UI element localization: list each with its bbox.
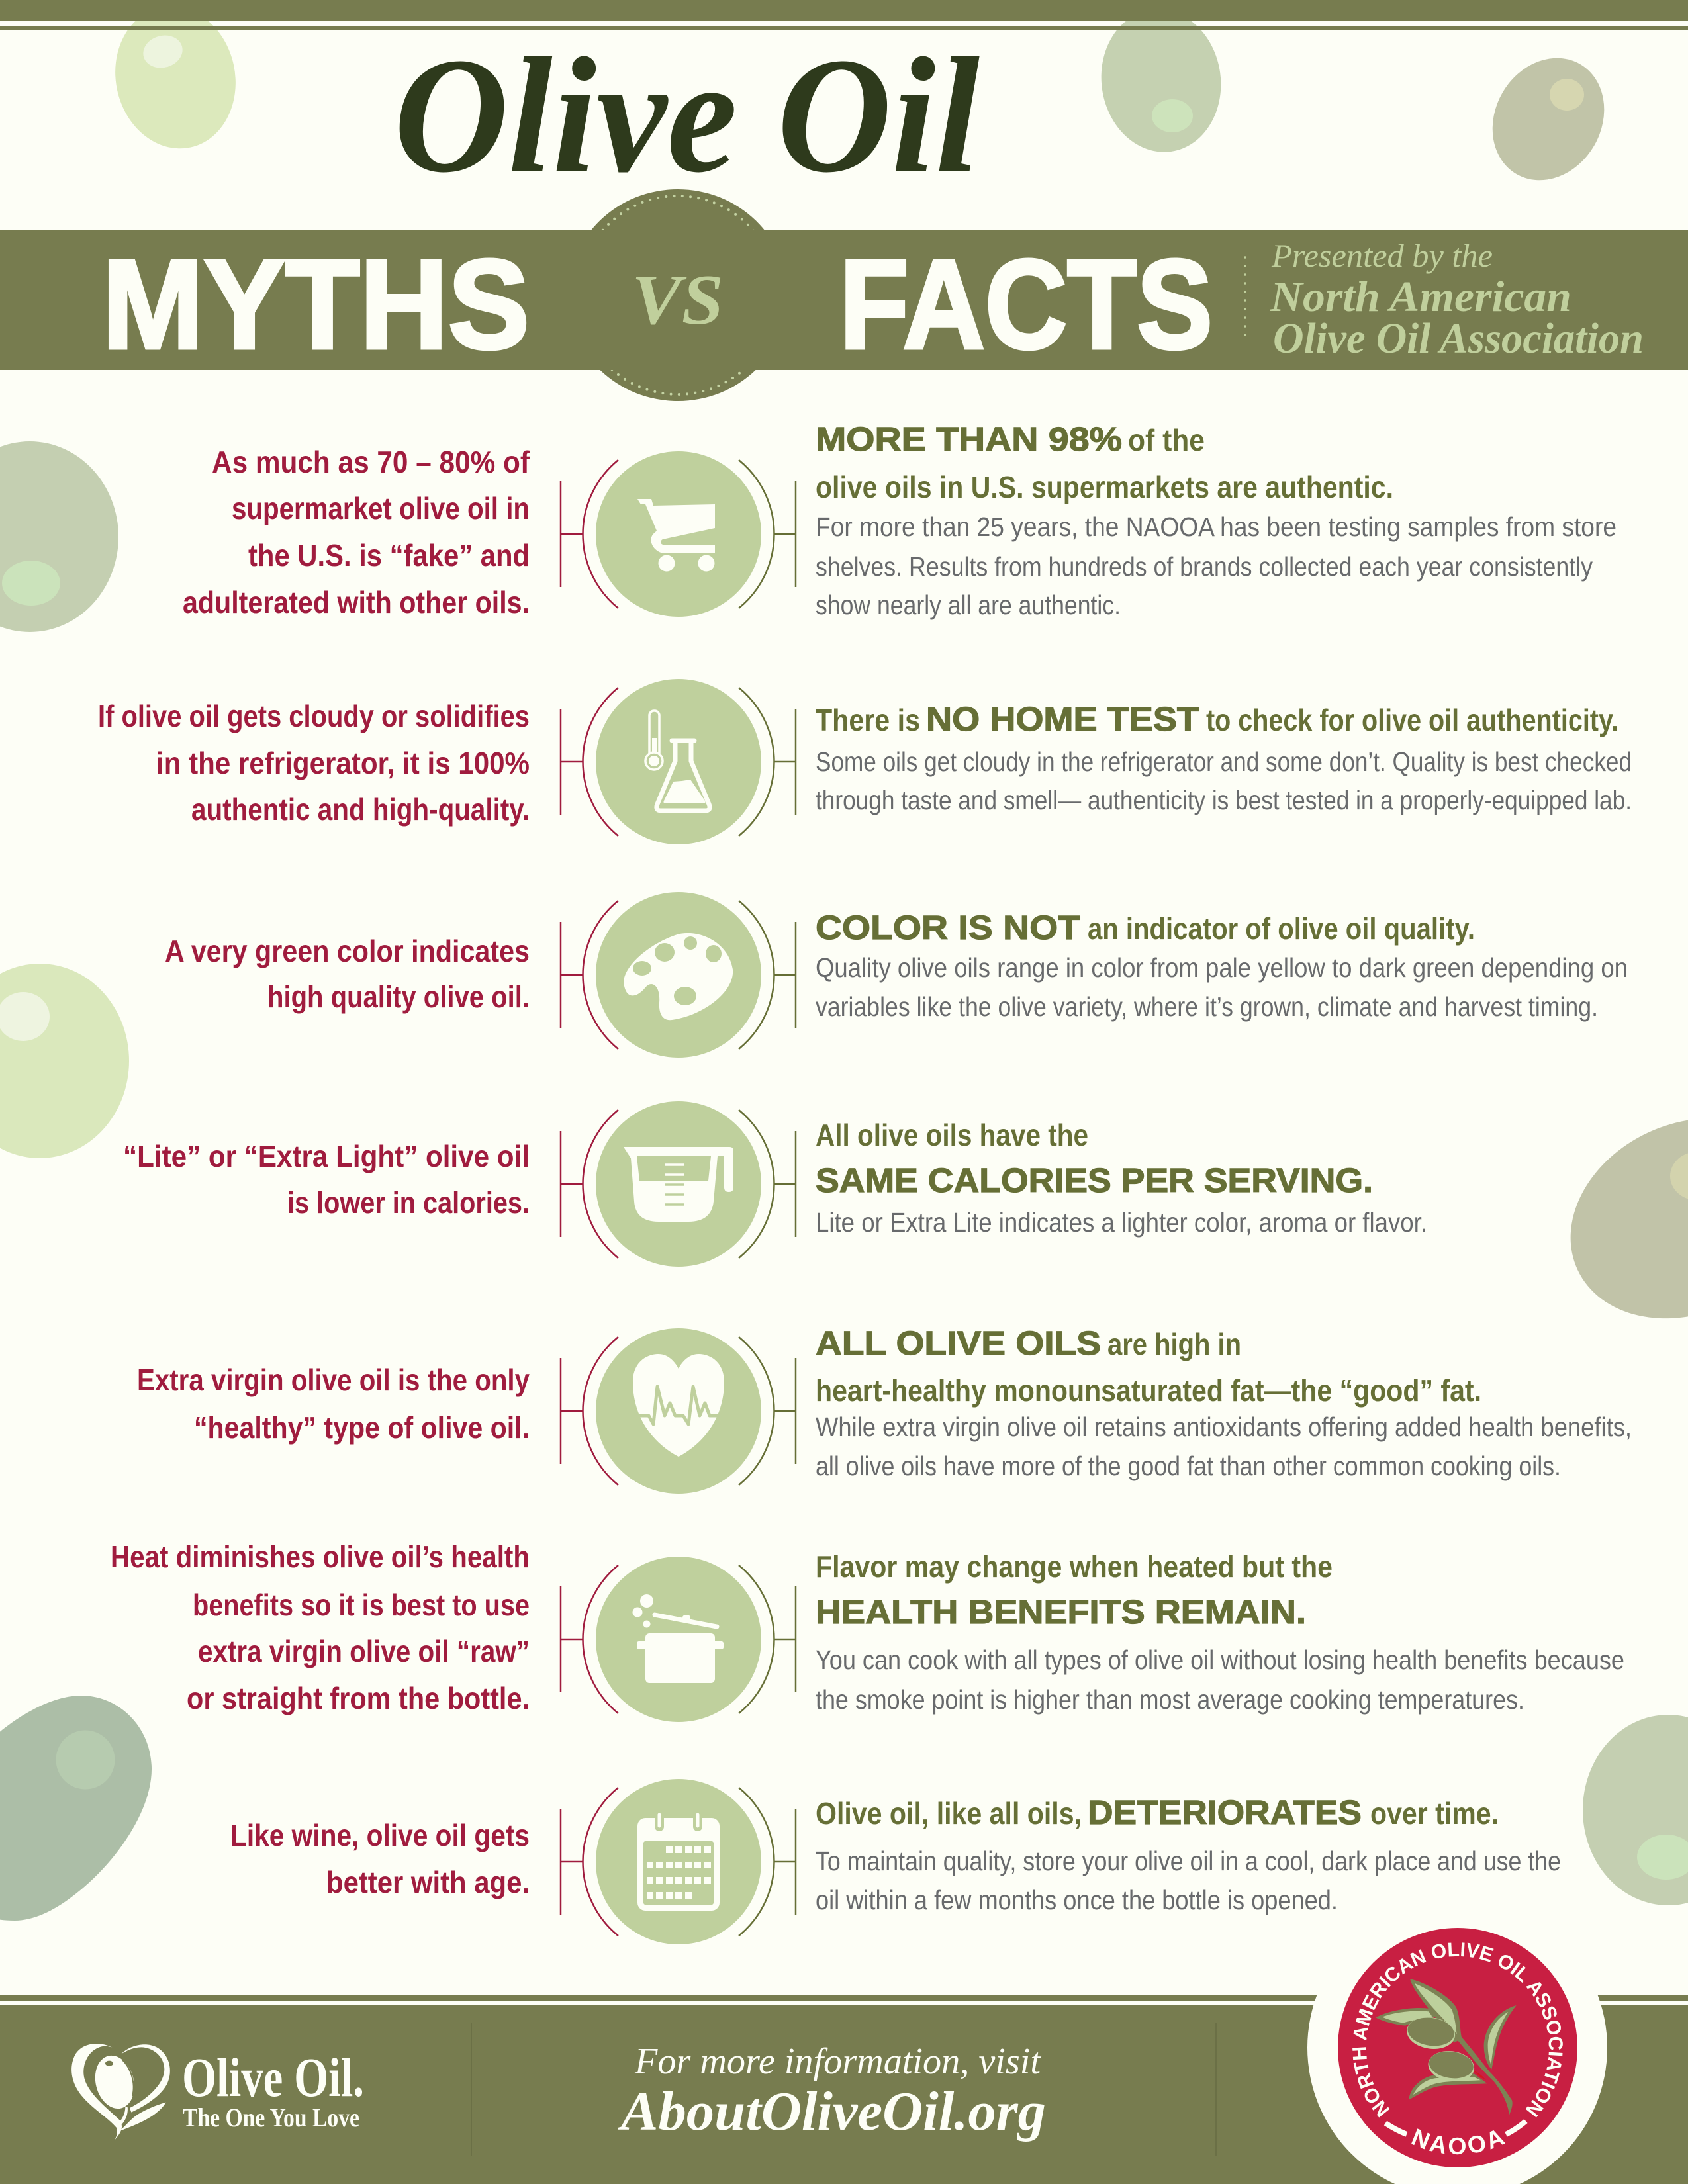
decorative olive: top centre bbox=[1092, 2, 1230, 159]
row 3: colour bbox=[165, 892, 1628, 1058]
row 4: calories bbox=[123, 1101, 1427, 1267]
fact 1: MORE THAN 98% bbox=[816, 420, 1122, 458]
seal text: acronym: NAOOA bbox=[1411, 2128, 1505, 2155]
tagline: The One You Love bbox=[183, 2103, 359, 2132]
myth 3: A very green color indicates bbox=[165, 934, 530, 968]
fact 2: NO HOME TEST bbox=[926, 700, 1199, 738]
top border band bbox=[0, 0, 1688, 30]
presented by bbox=[1270, 237, 1644, 363]
fact 6: Flavor may change when heated but the bbox=[816, 1549, 1333, 1584]
fact 6: the smoke point is higher than most average cooking temperatures. bbox=[816, 1684, 1524, 1715]
myth 6: benefits so it is best to use bbox=[193, 1588, 530, 1622]
NAOOA seal bbox=[1307, 1928, 1607, 2184]
fact 7: To maintain quality, store your olive oil in a cool, dark place and use the bbox=[816, 1846, 1561, 1876]
myth 5: Extra virgin olive oil is the only bbox=[137, 1363, 530, 1397]
connector and circle 1 bbox=[561, 451, 796, 617]
myth 6: Heat diminishes olive oil’s health bbox=[111, 1539, 530, 1574]
fact 1: show nearly all are authentic. bbox=[816, 590, 1121, 620]
fact 3: COLOR IS NOT bbox=[816, 909, 1080, 946]
fact 7: Olive oil, like all oils, bbox=[816, 1796, 1082, 1831]
row 1: supermarket authenticity bbox=[183, 420, 1617, 620]
myth 6: extra virgin olive oil “raw” bbox=[198, 1634, 530, 1668]
decorative olive: top right bbox=[1471, 38, 1626, 201]
wordmark: Olive Oil. bbox=[182, 2047, 364, 2109]
icon: flask and thermometer bbox=[645, 711, 710, 811]
myth 1: the U.S. is “fake” and bbox=[248, 538, 530, 572]
fact 1: olive oils in U.S. supermarkets are authentic. bbox=[816, 470, 1393, 504]
myth 6: or straight from the bottle. bbox=[187, 1681, 530, 1715]
myth 1: adulterated with other oils. bbox=[183, 585, 530, 619]
fact 4: All olive oils have the bbox=[816, 1118, 1088, 1152]
footer band bbox=[0, 1995, 1688, 2184]
myth 7 bbox=[230, 1818, 530, 1899]
fact 5: all olive oils have more of the good fat than other common cooking oils. bbox=[816, 1451, 1561, 1481]
icon: palette bbox=[624, 933, 733, 1020]
fact 6 bbox=[816, 1549, 1624, 1715]
myth 5 bbox=[137, 1363, 530, 1445]
presented by: North American bbox=[1270, 273, 1571, 321]
myth 4 bbox=[123, 1139, 530, 1220]
connector and circle 7 bbox=[561, 1779, 796, 1944]
heading: myths: MYTHS bbox=[102, 233, 530, 375]
row 6: heat bbox=[111, 1539, 1624, 1722]
myth 3: high quality olive oil. bbox=[267, 979, 530, 1014]
connector and circle 2 bbox=[561, 679, 796, 844]
presented by: Olive Oil Association bbox=[1273, 314, 1644, 363]
connector and circle 6 bbox=[561, 1557, 796, 1722]
title: Olive Oil bbox=[394, 24, 980, 207]
myth 6 bbox=[111, 1539, 530, 1715]
fact 1: For more than 25 years, the NAOOA has been testing samples from store bbox=[816, 512, 1617, 542]
fact 2: There is bbox=[816, 703, 920, 737]
fact 5: heart-healthy monounsaturated fat—the “good” fat. bbox=[816, 1373, 1481, 1408]
icon: heart with olive bbox=[71, 2044, 170, 2140]
icon: olive branch bbox=[1376, 1979, 1517, 2115]
myth 7: Like wine, olive oil gets bbox=[230, 1818, 530, 1852]
row 2: home test bbox=[98, 679, 1632, 844]
decorative olive: left middle bbox=[0, 964, 129, 1158]
decorative olive: right upper bbox=[1538, 1081, 1688, 1355]
myth 1 bbox=[183, 445, 530, 619]
heading: facts: FACTS bbox=[839, 233, 1213, 375]
fact 2: to check for olive oil authenticity. bbox=[1206, 703, 1618, 737]
icon: shopping cart bbox=[637, 499, 715, 572]
fact 4: SAME CALORIES PER SERVING. bbox=[816, 1161, 1373, 1199]
footer call to action bbox=[618, 2041, 1046, 2142]
fact 4: Lite or Extra Lite indicates a lighter color, aroma or flavor. bbox=[816, 1207, 1427, 1238]
fact 7: DETERIORATES bbox=[1088, 1794, 1362, 1831]
fact 3 bbox=[816, 909, 1628, 1022]
fact 5 bbox=[816, 1324, 1632, 1481]
connector and circle 5 bbox=[561, 1328, 796, 1494]
myth 2: in the refrigerator, it is 100% bbox=[156, 746, 530, 780]
icon: calendar bbox=[637, 1815, 720, 1911]
myth 4: is lower in calories. bbox=[287, 1185, 530, 1220]
decorative olive: left upper bbox=[0, 441, 118, 632]
connector and circle 4 bbox=[561, 1101, 796, 1267]
myth 3 bbox=[165, 934, 530, 1014]
icon: measuring cup bbox=[624, 1147, 733, 1222]
fact 1 bbox=[816, 420, 1617, 620]
fact 7 bbox=[816, 1794, 1561, 1915]
myth 1: supermarket olive oil in bbox=[232, 491, 530, 525]
connector and circle 3 bbox=[561, 892, 796, 1058]
fact 7: oil within a few months once the bottle is opened. bbox=[816, 1885, 1338, 1915]
fact 4 bbox=[816, 1118, 1427, 1238]
decorative olive: left lower bbox=[0, 1696, 152, 1921]
row 5: healthy fat bbox=[137, 1324, 1632, 1494]
presented by: Presented by the bbox=[1271, 237, 1493, 274]
fact 6: HEALTH BENEFITS REMAIN. bbox=[816, 1593, 1306, 1631]
footer call to action: For more information, visit bbox=[634, 2041, 1041, 2082]
decorative olive: right lower bbox=[1583, 1715, 1688, 1905]
fact 1: shelves. Results from hundreds of brands collected each year consistently bbox=[816, 551, 1593, 582]
seal text: association name: NORTH AMERICAN OLIVE OIL ASSOCIATION bbox=[1352, 1942, 1563, 2118]
fact 7: over time. bbox=[1370, 1796, 1499, 1831]
fact 5: are high in bbox=[1107, 1327, 1241, 1361]
fact 2 bbox=[816, 700, 1632, 815]
fact 1: of the bbox=[1128, 423, 1205, 457]
fact 5: ALL OLIVE OILS bbox=[816, 1324, 1101, 1362]
heading: vs: VS bbox=[632, 261, 724, 340]
myth 2 bbox=[98, 699, 530, 827]
icon: heart with pulse bbox=[633, 1354, 724, 1457]
footer call to action: AboutOliveOil.org bbox=[618, 2081, 1046, 2142]
header banner bbox=[0, 189, 1688, 401]
myth 1: As much as 70 – 80% of bbox=[212, 445, 530, 479]
myth 2: If olive oil gets cloudy or solidifies bbox=[98, 699, 530, 733]
row 7: ageing bbox=[230, 1779, 1561, 1944]
fact 3: an indicator of olive oil quality. bbox=[1088, 911, 1475, 946]
myth 2: authentic and high-quality. bbox=[191, 792, 530, 827]
decorative olive: top left bbox=[103, 0, 248, 159]
logo: olive oil the one you love bbox=[71, 2044, 364, 2140]
myth 4: “Lite” or “Extra Light” olive oil bbox=[123, 1139, 530, 1173]
myth 5: “healthy” type of olive oil. bbox=[194, 1410, 530, 1445]
myth 7: better with age. bbox=[326, 1865, 530, 1899]
icon: steaming pot bbox=[633, 1594, 724, 1683]
